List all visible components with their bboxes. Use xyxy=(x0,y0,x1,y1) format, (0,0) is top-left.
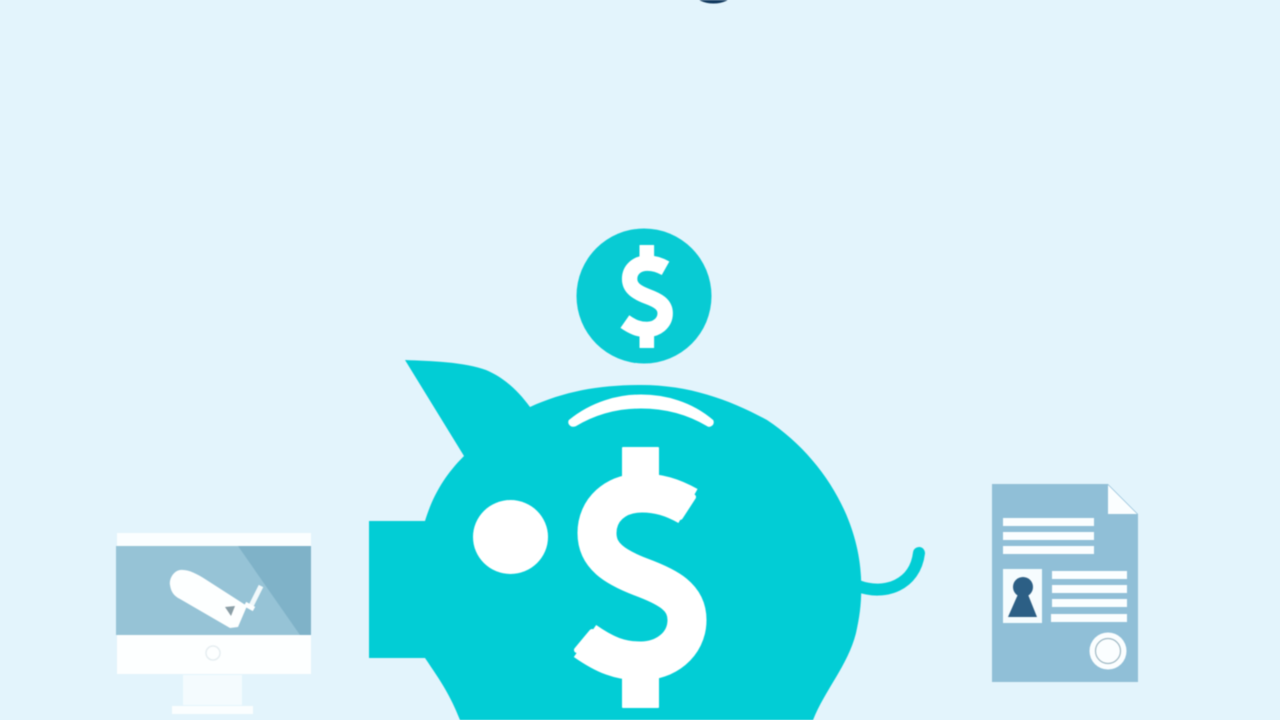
pig tail xyxy=(858,553,919,590)
monitor chin xyxy=(117,635,311,674)
icon: identity document xyxy=(992,484,1138,682)
pig eye xyxy=(473,500,548,574)
icon: piggy bank xyxy=(369,360,919,720)
monitor base xyxy=(172,706,253,714)
large dollar sign xyxy=(577,447,693,708)
screen shade xyxy=(238,546,311,635)
document detail lines xyxy=(1051,571,1127,622)
document sheet xyxy=(992,484,1138,682)
id photo xyxy=(1003,569,1042,623)
monitor stand xyxy=(183,675,242,705)
monitor screen xyxy=(116,546,311,635)
monitor top bezel xyxy=(117,533,311,547)
pig body xyxy=(369,360,861,720)
folded corner xyxy=(1108,485,1137,514)
document seal xyxy=(1090,632,1126,670)
icon: computer monitor with security camera xyxy=(116,533,311,714)
document header lines xyxy=(1003,518,1094,554)
icon: falling dollar coin xyxy=(576,228,712,364)
icon: cropped dark shape at top edge xyxy=(696,0,731,4)
monitor button xyxy=(206,646,220,660)
security camera xyxy=(170,570,261,628)
pig coin slot highlight xyxy=(570,396,712,425)
